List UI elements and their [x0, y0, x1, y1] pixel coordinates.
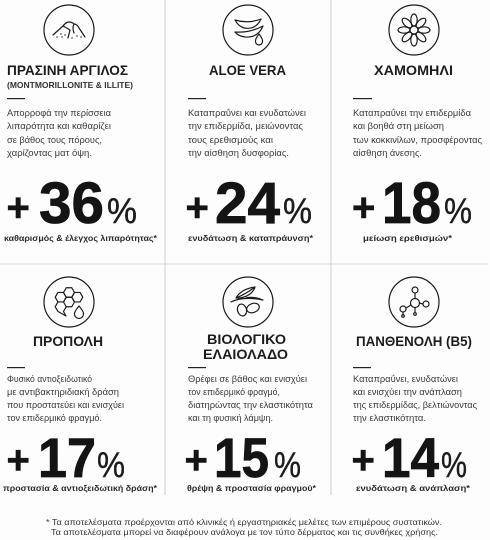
stat: +17%: 17 [38, 426, 96, 489]
divider dash [188, 98, 206, 99]
text block: aloe vera: τους ερεθισμούς και [188, 135, 273, 145]
icon: clay mound [44, 5, 94, 55]
heading: organic olive oil [203, 331, 288, 362]
heading: aloe vera: ALOE VERA [209, 62, 286, 78]
heading: clay: ΠΡΑΣΙΝΗ ΑΡΓΙΛΟΣ [7, 62, 128, 78]
divider dash [353, 367, 371, 368]
subheading: clay: (MONTMORILLONITE & ILLITE) [7, 80, 133, 90]
text block: aloe vera: Καταπραΰνει και ενυδατώνει [188, 108, 306, 118]
caption: +17%: προστασία & αντιοξειδωτική δράση* [3, 483, 158, 493]
panel: chamomile [352, 5, 483, 243]
heading: panthenol: ΠΑΝΘΕΝΟΛΗ (Β5) [356, 333, 472, 349]
text block: propolis: τον επιδερμικό φραγμό. [7, 413, 102, 423]
text block: aloe vera: την επιδερμίδα, μειώνοντας [188, 121, 304, 131]
text block: propolis: με αντιβακτηριδιακή δράση [7, 387, 119, 397]
text block: clay [7, 108, 111, 158]
stat: +14%: + [352, 438, 375, 482]
stat: +36% [6, 171, 137, 236]
text block: aloe vera: την αίσθηση δυσφορίας. [188, 148, 289, 158]
caption: +24%: ενυδάτωση & καταπράυνση* [188, 233, 314, 243]
icon: aloe leaves [223, 5, 273, 55]
text block: clay: Απορροφά την περίσσεια [7, 108, 111, 118]
text block: panthenol: και ενισχύει την ανάπλαση [353, 387, 462, 397]
stat: +14%: 14 [382, 426, 439, 489]
text block: panthenol: την ελαστικότητα. [353, 413, 426, 423]
stat: +24%: % [283, 192, 312, 231]
stat: +36%: 36 [39, 171, 104, 236]
stat: +15%: % [274, 446, 301, 485]
footnote: * Τα αποτελέσματα προέρχονται από κλινικές ή εργαστηριακές μελέτες των επιμέρους συστατικών. [46, 517, 442, 527]
panel: green clay [4, 5, 158, 243]
caption: +36%: καθαρισμός & έλεγχος λιπαρότητας* [4, 233, 158, 243]
stat: +15% [184, 426, 301, 489]
stat: +14% [352, 426, 467, 489]
stat: +15%: 15 [214, 426, 269, 489]
stat: +14%: % [441, 446, 467, 485]
icon: honeycomb and drop [44, 277, 94, 327]
caption: +14%: ενυδάτωση & ανάπλαση* [356, 483, 471, 493]
heading: organic olive oil: ΒΙΟΛΟΓΙΚΟ [207, 331, 286, 347]
stat: +18%: + [352, 186, 375, 230]
stat: +18%: % [444, 192, 472, 231]
text block: organic olive oil: διατηρώντας την ελαστικότητα [188, 400, 313, 410]
stat: +36%: % [107, 192, 137, 231]
text block: chamomile: Καταπραΰνει την επιδερμίδα [353, 108, 471, 118]
text block: chamomile [353, 108, 483, 158]
heading: propolis: ΠΡΟΠΟΛΗ [33, 333, 103, 349]
heading: chamomile: ΧΑΜΟΜΗΛΙ [374, 62, 453, 78]
panel: aloe vera [186, 5, 314, 243]
text block: panthenol: Καταπραΰνει, ενυδατώνει [353, 374, 458, 384]
stat: +15%: + [184, 438, 208, 482]
stat: +24% [186, 171, 312, 236]
icon: molecule [389, 277, 439, 327]
text block: chamomile: αίσθηση άνεσης. [353, 148, 422, 158]
text block: chamomile: και βοηθά στη μείωση [353, 121, 444, 131]
heading: organic olive oil: ΕΛΑΙΟΛΑΔΟ [203, 346, 288, 362]
text block: propolis: που προστατεύει και ενισχύει [7, 400, 124, 410]
icon: chamomile flower [389, 5, 439, 55]
caption: +18%: μείωση ερεθισμών* [363, 233, 453, 243]
stat: +24%: + [186, 186, 209, 230]
text block: organic olive oil: τον επιδερμικό φραγμό, [188, 387, 280, 397]
text block: organic olive oil: Θρέφει σε βάθος και ενισχύει [188, 374, 307, 384]
stat: +24%: 24 [215, 171, 280, 236]
stat: +17%: % [97, 446, 125, 485]
footnote: Τα αποτελέσματα μπορεί να διαφέρουν ανάλογα με τον τύπο δέρματος και τις συνθήκες χρήσης. [51, 527, 438, 537]
text block: panthenol [353, 374, 478, 423]
stat: +17% [6, 426, 125, 489]
panel: propolis [3, 277, 158, 493]
stat: +18%: 18 [382, 171, 441, 236]
panel: organic olive oil [184, 277, 317, 493]
text block: propolis: Φυσικό αντιοξειδωτικό [7, 374, 92, 384]
stat: +18% [352, 171, 472, 236]
text block: organic olive oil: και τη φυσική λάμψη. [188, 413, 273, 423]
text block: panthenol: της επιδερμίδας, βελτιώνοντας [353, 400, 478, 410]
caption: +15%: θρέψη & προστασία φραγμού* [187, 483, 317, 493]
text block: clay: χαρίζοντας ματ όψη. [7, 148, 92, 158]
divider dash [7, 98, 25, 99]
footnote [46, 517, 442, 537]
panel: panthenol [352, 277, 478, 493]
text block: clay: λιπαρότητα και καθαρίζει [7, 121, 111, 131]
divider dash [353, 98, 372, 99]
icon: olive branch [223, 277, 273, 327]
divider dash [188, 367, 206, 368]
text block: clay: σε βάθος τους πόρους, [7, 135, 102, 145]
stat: +17%: + [6, 438, 30, 482]
text block: propolis [7, 374, 124, 423]
divider dash [7, 367, 25, 368]
text block: chamomile: των κοκκινίλων, προσφέροντας [353, 135, 483, 145]
text block: aloe vera [188, 108, 306, 158]
stat: +36%: + [6, 186, 30, 230]
text block: organic olive oil [188, 374, 313, 423]
